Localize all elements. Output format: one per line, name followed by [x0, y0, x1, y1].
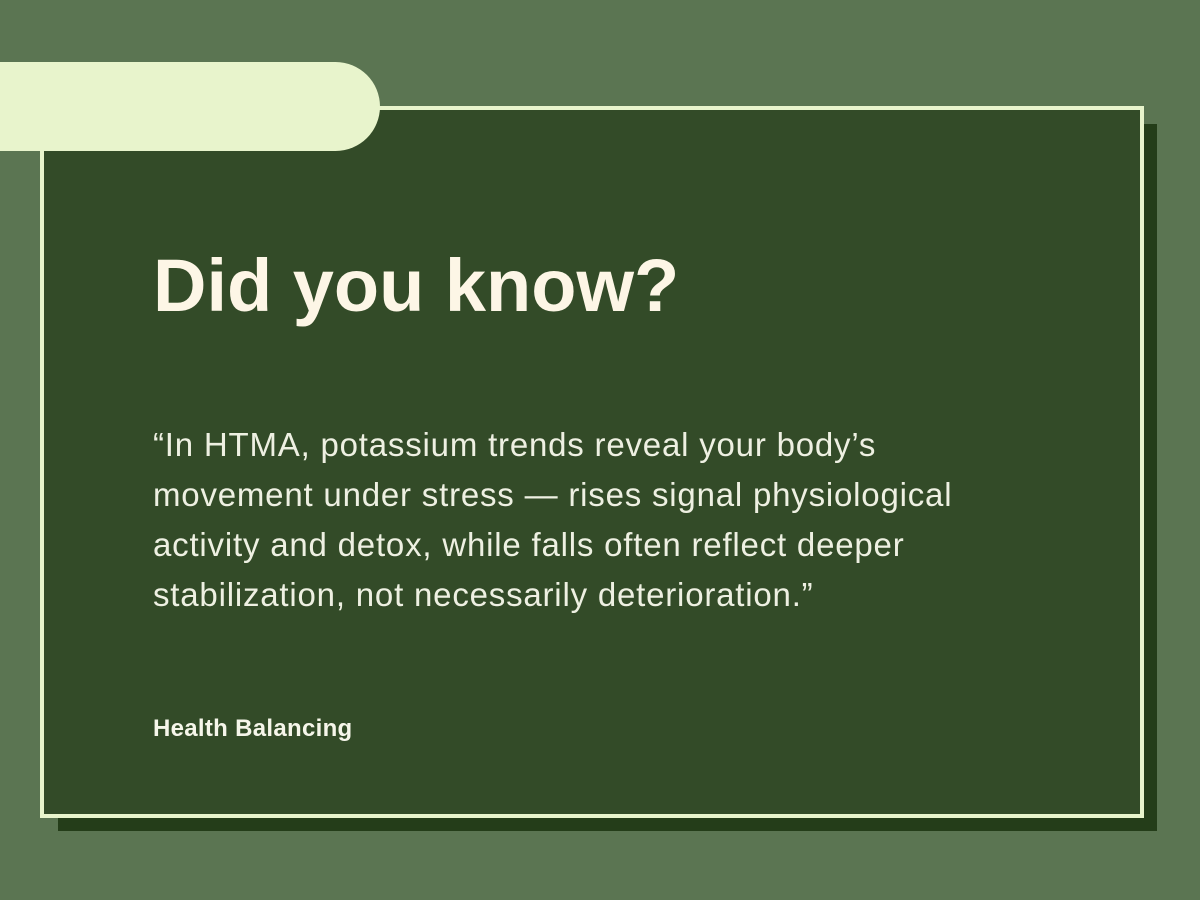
footer attribution: Health Balancing	[153, 715, 353, 742]
title: Did you know?	[153, 244, 679, 327]
quote text: movement under stress — rises signal physiological	[153, 476, 952, 513]
quote text: stabilization, not necessarily deterioration.”	[153, 576, 813, 613]
decorative pill tab	[0, 62, 380, 151]
quote text: “In HTMA, potassium trends reveal your body’s	[153, 426, 876, 463]
quote text: activity and detox, while falls often reflect deeper	[153, 526, 904, 563]
quote text	[153, 426, 952, 613]
card panel	[40, 106, 1144, 818]
card shadow	[58, 124, 1157, 831]
